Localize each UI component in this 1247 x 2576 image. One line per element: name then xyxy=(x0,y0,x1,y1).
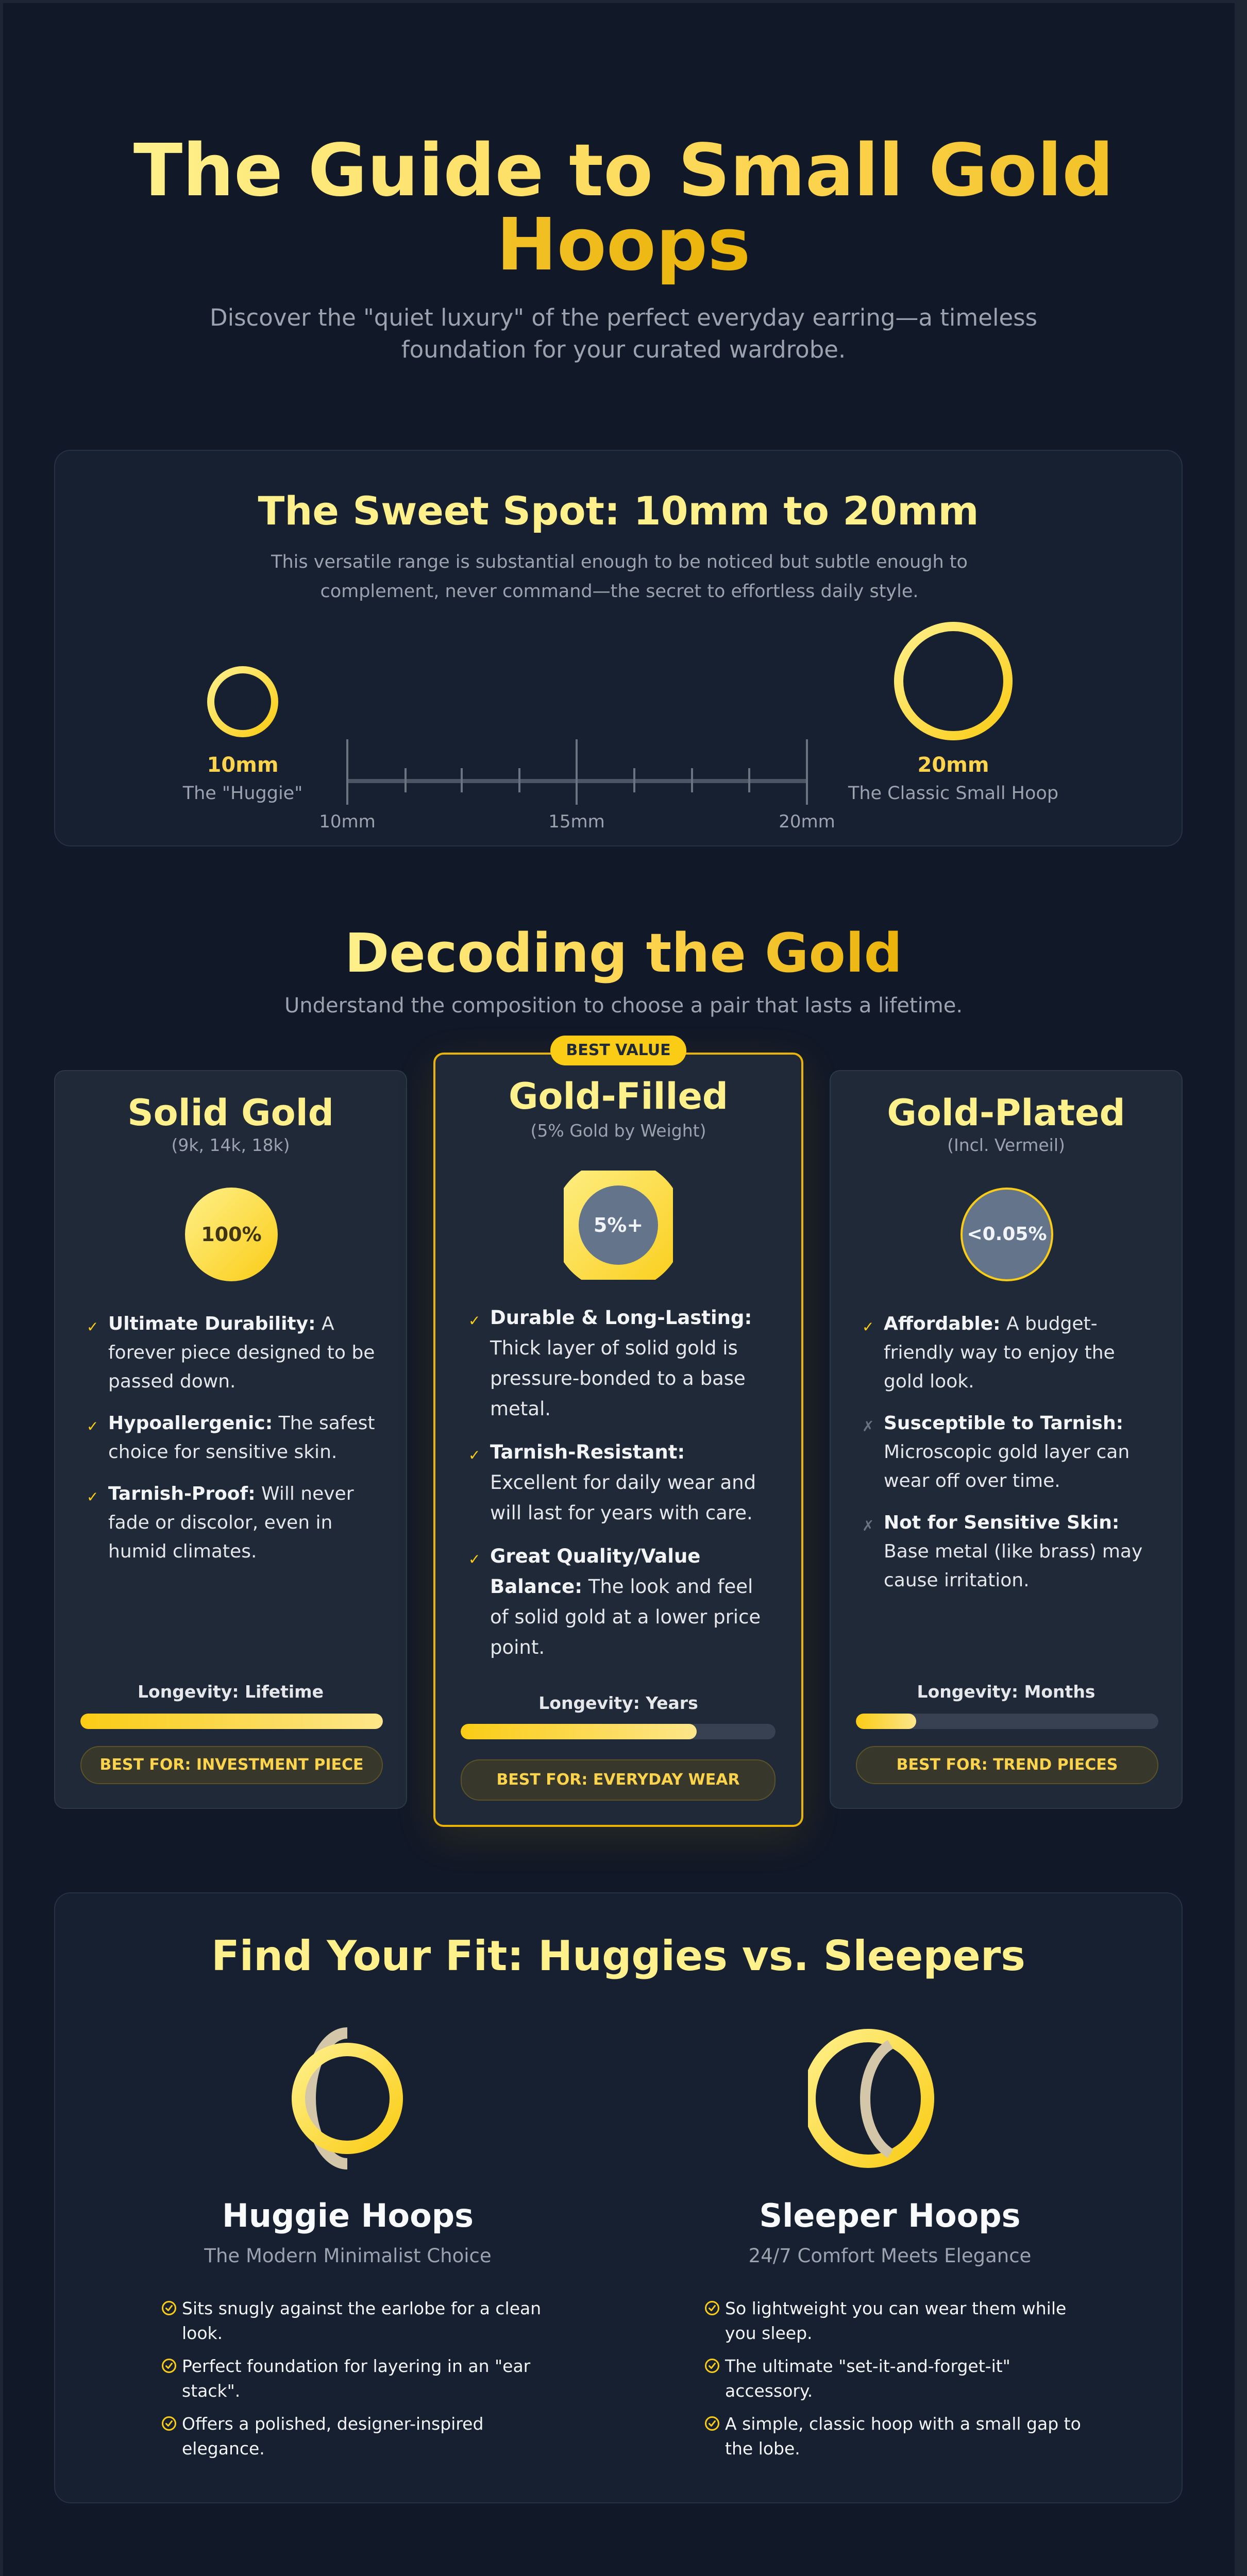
benefits list xyxy=(862,1313,1142,1591)
best for pill: BEST FOR: EVERYDAY WEAR xyxy=(496,1771,740,1789)
label: 10mm: 10mm xyxy=(207,753,279,777)
size ruler diagram xyxy=(182,622,1058,832)
card: gold-filled: ✓ xyxy=(468,1551,480,1568)
ruler labels: 10mm xyxy=(319,811,376,832)
card: gold-filled: ✓ xyxy=(468,1447,480,1464)
panel: sweet spot xyxy=(54,450,1183,846)
subtitle: Discover the "quiet luxury" of the perfect everyday earring—a timeless foundation for your curated wardrobe. xyxy=(210,304,1037,363)
icon: 5% ring: 5%+ xyxy=(594,1214,643,1236)
card: gold-plated: ✓ xyxy=(862,1318,874,1335)
card title: Solid Gold xyxy=(127,1092,334,1134)
best for pill: BEST FOR: TREND PIECES xyxy=(897,1756,1118,1774)
benefits list: Great Quality/Value Balance: The look and feel of solid gold at a lower price point. xyxy=(490,1545,761,1658)
label: 20mm: The Classic Small Hoop xyxy=(848,783,1058,804)
label: 10mm: The "Huggie" xyxy=(182,783,302,804)
benefits list xyxy=(468,1307,761,1658)
ruler labels: 20mm xyxy=(779,811,835,832)
benefits list: Tarnish-Resistant: Excellent for daily wear and will last for years with care. xyxy=(490,1441,756,1524)
heading: find your fit: Find Your Fit: Huggies vs. Sleepers xyxy=(211,1932,1025,1980)
card subtitle: (9k, 14k, 18k) xyxy=(171,1135,290,1155)
checklist: accessory. xyxy=(725,2381,813,2401)
heading: huggie hoops: Huggie Hoops xyxy=(222,2197,474,2234)
benefits list: Durable & Long-Lasting: Thick layer of solid gold is pressure-bonded to a base metal. xyxy=(490,1307,752,1420)
title: Hoops xyxy=(496,203,751,287)
icon: 100% coin xyxy=(185,1188,278,1281)
heading: sweet spot: The Sweet Spot: 10mm to 20mm xyxy=(258,488,979,534)
icon: <0.05% disc: <0.05% xyxy=(967,1224,1047,1245)
checklist: Offers a polished, designer-inspired xyxy=(182,2414,483,2434)
badge: best value xyxy=(550,1036,686,1065)
best for pill xyxy=(856,1746,1158,1784)
ruler xyxy=(347,739,807,805)
card: solid gold: ✓ xyxy=(87,1418,98,1435)
icon: 20mm hoop xyxy=(899,626,1008,736)
benefits list: Hypoallergenic: The safest choice for sensitive skin. xyxy=(108,1413,375,1463)
longevity bar xyxy=(80,1714,383,1729)
subheading: decoding: Understand the composition to choose a pair that lasts a lifetime. xyxy=(284,994,963,1018)
checklist xyxy=(162,2298,541,2459)
card: gold-plated: ✗ xyxy=(862,1418,874,1435)
benefits list: Ultimate Durability: A forever piece designed to be passed down. xyxy=(108,1313,375,1392)
benefits list xyxy=(87,1313,375,1562)
checklist: the lobe. xyxy=(725,2438,800,2459)
checklist: So lightweight you can wear them while xyxy=(725,2298,1066,2318)
best for pill xyxy=(80,1746,383,1784)
checklist: you sleep. xyxy=(725,2323,813,2343)
column: sleeper xyxy=(705,2197,1081,2459)
card: gold-filled: ✓ xyxy=(468,1312,480,1329)
ruler labels xyxy=(319,811,835,832)
best for pill xyxy=(461,1759,776,1801)
checklist xyxy=(705,2298,1081,2459)
icon: 10mm hoop xyxy=(211,670,275,734)
heading: decoding the gold: Decoding the Gold xyxy=(345,922,902,985)
ruler labels: 15mm xyxy=(548,811,605,832)
benefits list: Susceptible to Tarnish: Microscopic gold layer can wear off over time. xyxy=(884,1413,1130,1492)
icon: huggie hoop xyxy=(292,2027,403,2170)
card: gold-filled xyxy=(433,1053,803,1827)
label: 20mm: 20mm xyxy=(917,753,989,777)
subtitle: 24/7 Comfort Meets Elegance xyxy=(749,2245,1031,2267)
checklist: stack". xyxy=(182,2381,240,2401)
column: huggie xyxy=(162,2197,541,2459)
benefits list: Not for Sensitive Skin: Base metal (like brass) may cause irritation. xyxy=(884,1512,1142,1591)
heading: sleeper hoops: Sleeper Hoops xyxy=(760,2197,1020,2234)
card subtitle: (5% Gold by Weight) xyxy=(531,1121,706,1141)
card: gold-plated: ✗ xyxy=(862,1517,874,1534)
checklist: The ultimate "set-it-and-forget-it" xyxy=(725,2356,1010,2376)
benefits list: Tarnish-Proof: Will never fade or discolor, even in humid climates. xyxy=(108,1483,354,1562)
checklist: Perfect foundation for layering in an "ear xyxy=(182,2356,530,2376)
title xyxy=(133,129,1114,287)
best for pill: BEST FOR: INVESTMENT PIECE xyxy=(100,1756,363,1774)
longevity bar xyxy=(461,1724,776,1739)
card: solid gold: ✓ xyxy=(87,1318,98,1335)
card: solid gold xyxy=(54,1070,407,1809)
longevity label: Longevity: Years xyxy=(538,1693,698,1713)
checklist: look. xyxy=(182,2323,223,2343)
label: 10mm xyxy=(182,753,302,804)
card subtitle: (Incl. Vermeil) xyxy=(947,1135,1065,1155)
checklist: A simple, classic hoop with a small gap to xyxy=(725,2414,1081,2434)
badge: best value: BEST VALUE xyxy=(566,1041,671,1059)
checklist: elegance. xyxy=(182,2438,265,2459)
card: solid gold: ✓ xyxy=(87,1488,98,1505)
icon: sleeper hoop xyxy=(808,2029,934,2168)
icon: 100% coin: 100% xyxy=(201,1223,262,1246)
title: The Guide to Small Gold xyxy=(133,129,1114,213)
label: 20mm xyxy=(848,753,1058,804)
checklist: Sits snugly against the earlobe for a clean xyxy=(182,2298,541,2318)
icon: <0.05% disc xyxy=(960,1188,1053,1281)
longevity label: Longevity: Lifetime xyxy=(138,1682,324,1702)
longevity bar xyxy=(856,1714,1158,1729)
subtitle: The Modern Minimalist Choice xyxy=(204,2245,492,2267)
description: This versatile range is substantial enough to be noticed but subtle enough to complement, never command—the secret to effortless daily style. xyxy=(271,552,968,602)
longevity label: Longevity: Months xyxy=(917,1682,1095,1702)
panel: huggies vs sleepers xyxy=(54,1892,1183,2503)
benefits list: Affordable: A budget-friendly way to enjoy the gold look. xyxy=(884,1313,1115,1392)
card: gold-plated xyxy=(830,1070,1183,1809)
icon: 5% ring xyxy=(564,1171,673,1280)
card title: Gold-Plated xyxy=(887,1092,1125,1134)
card title: Gold-Filled xyxy=(509,1075,728,1117)
